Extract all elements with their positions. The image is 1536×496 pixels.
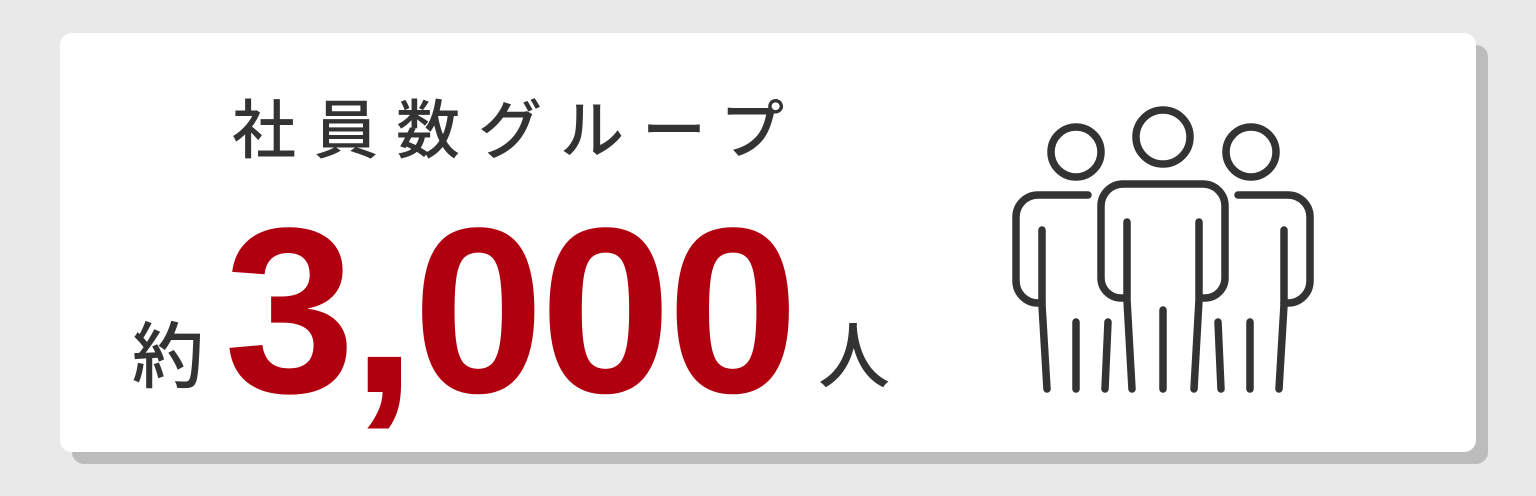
text: unit: 人 [818,318,890,398]
big number: 3,000 [224,179,795,443]
text: prefix: 約 [132,318,204,398]
heading: 社員数グループ [232,95,802,167]
panel: card [60,33,1476,452]
